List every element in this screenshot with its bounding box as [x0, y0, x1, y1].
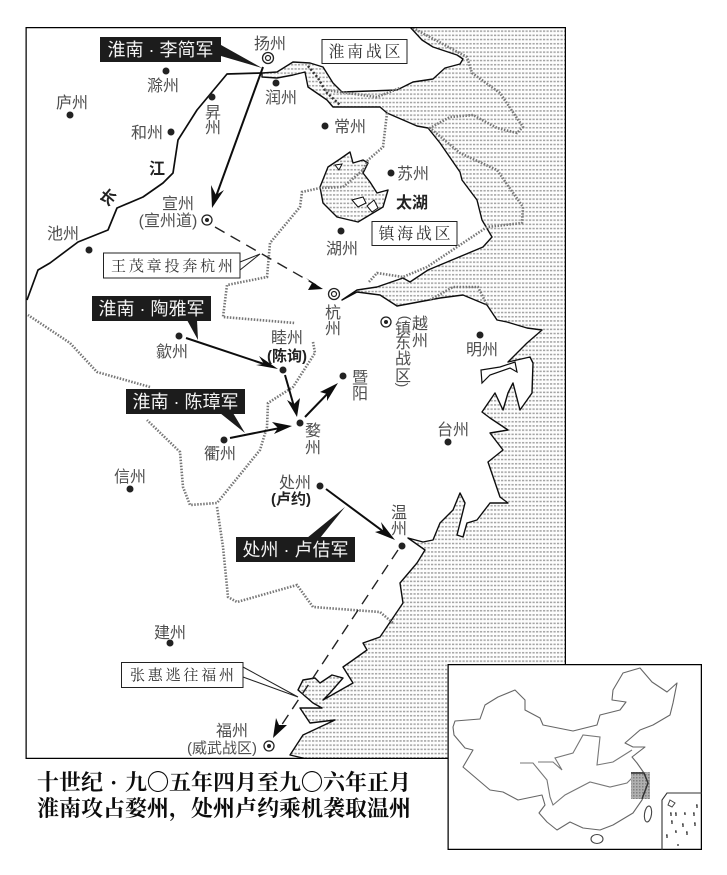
place names: 明州: [466, 342, 498, 359]
place names: 太湖: [396, 194, 428, 212]
rivers: [520, 735, 637, 805]
caption: 十世纪·九〇五年四月至九〇六年正月: [37, 770, 411, 795]
inlet near Mingzhou: [481, 362, 517, 383]
place names: 福州: [216, 722, 248, 740]
place names: 湖州: [326, 240, 358, 258]
army label: Tao Ya: [92, 296, 211, 340]
panel: locator map of China: [448, 664, 702, 850]
lake: Taihu: [320, 152, 388, 222]
place names: (威武战区): [187, 740, 257, 757]
highlighted region: [631, 772, 650, 799]
place names: 信州: [114, 468, 146, 486]
place names: 阳: [352, 385, 368, 403]
place names: 州: [412, 333, 428, 350]
place names: 州: [205, 120, 221, 137]
highlighted coast: [631, 773, 648, 799]
place names: (宣州道): [139, 212, 197, 230]
circuit boundaries: [28, 28, 523, 623]
place names: 长: [95, 186, 119, 210]
place names: 区: [395, 368, 411, 385]
estuary shoals: [308, 66, 340, 105]
place names: 滁州: [147, 77, 179, 95]
place names: 常州: [334, 118, 366, 136]
place names: 处州: [279, 474, 311, 492]
army label: Li Jian: 淮南 · 李简军: [108, 40, 214, 60]
place names: 宣州: [162, 195, 194, 213]
place names: 州: [325, 321, 341, 338]
river: Yangtze: [27, 73, 262, 300]
region label: Zhenhai: [372, 222, 457, 246]
army label: Lu Ji: 处州 · 卢佶军: [242, 540, 348, 560]
China outline: [453, 668, 677, 830]
place names: [47, 35, 498, 757]
army label: Li Jian: [100, 37, 262, 68]
note: Wang Maozhang: [104, 253, 260, 278]
place names: 温: [391, 504, 407, 522]
place names: ): [395, 383, 411, 387]
army label: Lu Ji: [236, 507, 355, 562]
caption: 淮南攻占婺州，处州卢约乘机袭取温州: [37, 796, 411, 822]
place names: 苏州: [397, 165, 429, 183]
place names: 州: [391, 521, 407, 538]
army label: Chen Zhang: 淮南 · 陈璋军: [132, 392, 238, 412]
note: Zhang Hui: [122, 662, 298, 697]
place names: 台州: [437, 421, 469, 439]
place names: 镇: [395, 320, 411, 338]
city markers: [66, 52, 484, 751]
region label: Zhenhai: 镇海战区: [378, 224, 450, 243]
South China Sea inset: [662, 793, 702, 850]
place names: 庐州: [56, 94, 88, 112]
place names: 扬州: [254, 35, 286, 53]
place names: 歙州: [156, 342, 188, 361]
islands: [591, 834, 603, 844]
place names: 州: [305, 440, 321, 457]
place names: 睦州: [271, 329, 303, 347]
place names: 越: [412, 315, 428, 333]
place names: (: [398, 316, 414, 321]
sea and coastline: [262, 27, 566, 759]
place names: 东: [395, 334, 411, 352]
caption: [37, 770, 411, 822]
route arrows: [186, 67, 398, 738]
place names: 池州: [47, 225, 79, 243]
place names: 衢州: [204, 445, 236, 463]
place names: 战: [395, 350, 411, 368]
frame: [26, 27, 566, 759]
army label: Tao Ya: 淮南 · 陶雅军: [98, 299, 204, 319]
region label: Huainan: 淮南战区: [328, 43, 400, 61]
place names: 昇: [205, 105, 221, 122]
note: Wang Maozhang: 王茂章投奔杭州: [111, 257, 233, 275]
army label: Chen Zhang: [126, 389, 245, 433]
place names: (卢约): [271, 491, 311, 508]
region label: Huainan: [322, 40, 407, 64]
panel: main map: [26, 27, 566, 759]
place names: 江: [149, 160, 165, 178]
place names: (陈询): [267, 347, 307, 365]
place names: 杭: [325, 304, 341, 322]
place names: 润州: [265, 89, 297, 107]
place names: 婺: [305, 422, 321, 440]
place names: 暨: [352, 369, 368, 387]
note: Zhang Hui: 张惠逃往福州: [130, 666, 234, 684]
place names: 建州: [154, 624, 186, 642]
place names: 和州: [131, 124, 163, 142]
